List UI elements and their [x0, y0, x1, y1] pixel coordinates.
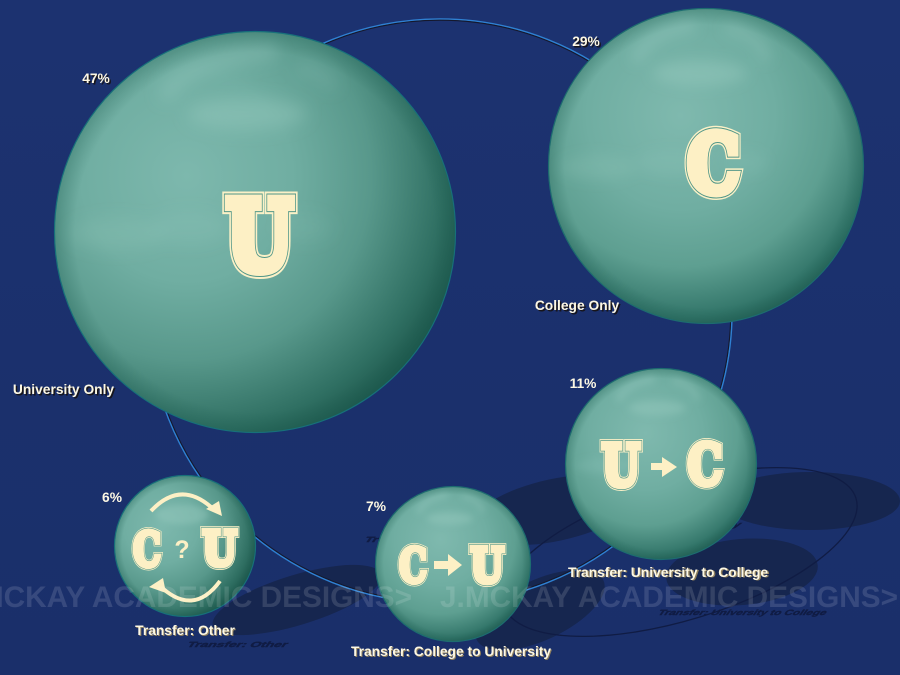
ghost label shadows on the floor — [185, 521, 829, 649]
label: Transfer College to University: Transfer: College to University — [352, 645, 552, 660]
sphere: Transfer University to College — [566, 368, 756, 560]
letters and question mark: C — [133, 523, 161, 578]
highlights — [69, 52, 333, 250]
sphere: College Only — [548, 8, 864, 324]
sphere: University Only — [54, 32, 456, 432]
highlights — [560, 26, 767, 180]
letters and question mark: ? — [174, 536, 190, 564]
ghost label shadows on the floor: Transfer: University to College — [655, 609, 829, 617]
watermark: J.MCKAY ACADEMIC DESIGNS> — [440, 581, 898, 614]
letters and question mark — [133, 522, 236, 578]
label: Transfer College to University: Transfer: College to University — [351, 644, 551, 659]
label: University Only: University Only — [13, 382, 114, 397]
label: College Only: College Only — [535, 298, 619, 313]
label: Transfer Other: Transfer: Other — [135, 623, 235, 638]
letters and arrow U to C: U — [602, 433, 640, 499]
letters and arrow U to C: C — [688, 432, 722, 498]
watermark — [0, 581, 898, 614]
letter C: C — [688, 117, 740, 211]
letters and question mark: U — [202, 522, 236, 577]
letter U: U — [226, 181, 292, 292]
letters and arrow U to C — [602, 432, 722, 499]
ghost label shadows on the floor: Tr — [362, 536, 382, 544]
letter C: C — [688, 117, 740, 211]
label: 11%: 11% — [570, 376, 596, 391]
cast shadows on the floor — [206, 462, 900, 667]
letter C: C — [688, 117, 740, 211]
label: Transfer Other: Transfer: Other — [136, 624, 236, 639]
letters and arrow C to U: C — [399, 539, 427, 594]
letters and arrow U to C: U — [602, 433, 640, 499]
highlights — [576, 379, 697, 474]
ring shadow on the floor — [484, 433, 876, 671]
letters and arrow C to U: C — [399, 539, 427, 594]
highlights — [156, 505, 208, 524]
letter U: U — [226, 181, 292, 292]
letters and arrow U to C: U — [602, 433, 640, 499]
label: 47%: 47% — [84, 72, 111, 88]
highlights — [419, 495, 482, 525]
label: 47%: 47% — [82, 71, 110, 86]
letters and arrow C to U: U — [470, 539, 504, 594]
label: Transfer University to College: Transfer: University to College — [569, 566, 770, 580]
label: Transfer University to College: Transfer: University to College — [568, 565, 768, 580]
letters and arrow C to U: U — [470, 539, 504, 594]
sphere: Transfer Other — [114, 476, 256, 616]
ghost label shadows on the floor: Transfer: Other — [185, 641, 291, 649]
letters and arrow U to C: C — [688, 432, 722, 498]
letters and question mark: U — [202, 522, 236, 577]
letters and arrow C to U — [399, 539, 504, 594]
sphere: Transfer College to University — [376, 486, 530, 642]
label: College Only: College Only — [536, 300, 621, 314]
connecting ring — [148, 19, 732, 603]
label: 29%: 29% — [574, 36, 601, 50]
letter U: U — [226, 181, 292, 292]
label: 6%: 6% — [102, 490, 122, 505]
ghost label shadows on the floor: Only — [707, 521, 744, 529]
label: 29%: 29% — [572, 34, 600, 49]
icon: circular arrows — [149, 494, 222, 601]
letters and question mark: C — [133, 523, 161, 578]
letters and arrow C to U: C — [399, 539, 427, 594]
letters and question mark: C — [133, 523, 161, 578]
label: 7%: 7% — [366, 499, 386, 514]
label: University Only: University Only — [14, 384, 116, 398]
letters and question mark: U — [202, 522, 236, 577]
letters and arrow C to U: U — [470, 539, 504, 594]
letters and arrow U to C: C — [688, 432, 722, 498]
